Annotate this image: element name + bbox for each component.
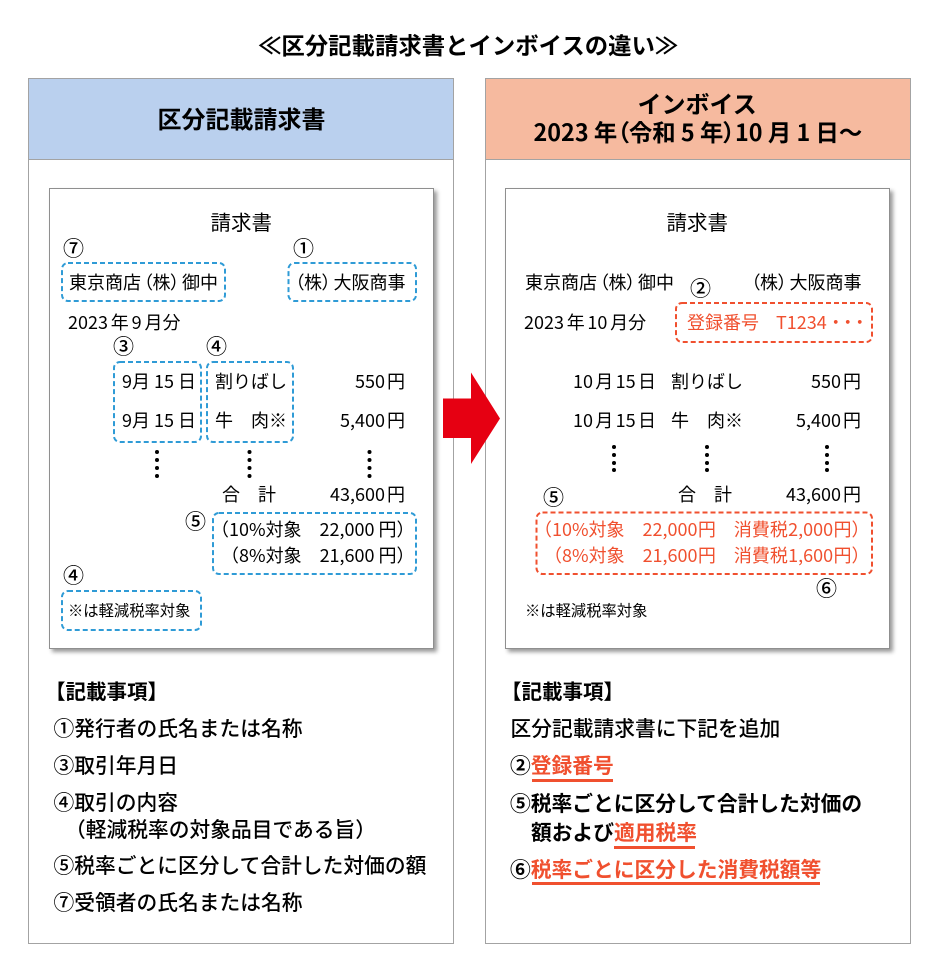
tax line 10 right: （10%対象 22,000 円 消費税 2,000 円） [534, 516, 869, 542]
date 1 right: 10 月 15 日 [573, 368, 656, 394]
item 7: ⑦受領者の氏名または名称 [54, 886, 303, 916]
underline 6 [532, 882, 820, 884]
addressee right: 東京商店（株）御中 [525, 269, 674, 295]
billing month right: 2023 年 10 月分 [524, 309, 646, 335]
registration number: 登録番号 T1234・・・ [687, 309, 863, 335]
reduced rate note: ※は軽減税率対象 [68, 599, 190, 621]
total amount: 43,600 円 [330, 481, 405, 507]
list heading: 【記載事項】 [45, 675, 168, 705]
item 4: ④取引の内容 [54, 786, 178, 816]
tax line 8: （8%対象 21,600 円） [221, 542, 415, 568]
reduced rate note right: ※は軽減税率対象 [525, 599, 647, 621]
date 1: 9月 15 日 [122, 368, 196, 394]
underline 5 [614, 846, 695, 848]
price 2 right: 5,400 円 [796, 407, 861, 433]
tax line 8 right: （8%対象 21,600 円 消費税 1,600 円） [544, 542, 869, 568]
date 2: 9月 15 日 [122, 407, 196, 433]
panel: left [28, 78, 454, 944]
badge 7: ⑦ [63, 233, 84, 263]
item 5: ⑤税率ごとに区分して合計した対価の額 [54, 849, 426, 879]
heading: left: 区分記載請求書 [158, 100, 326, 135]
panel: right [484, 78, 910, 944]
item 5: ⑤税率ごとに区分して合計した対価の [510, 787, 862, 817]
invoice title: right: 請求書 [666, 206, 728, 236]
price 1 right: 550 円 [811, 368, 861, 394]
price 1: 550 円 [355, 368, 405, 394]
badge 2: ② [690, 273, 711, 303]
billing month: 2023 年 9 月分 [68, 309, 180, 335]
item 3: ③取引年月日 [54, 749, 178, 779]
list heading: 【記載事項】 [501, 675, 624, 705]
heading: right: インボイス [638, 85, 757, 120]
item 6: ⑥税率ごとに区分した消費税額等 [510, 853, 821, 883]
item 2: ②登録番号 [510, 749, 614, 779]
heading: right: 2023 年（令和 5 年）10 月 1 日～ [534, 114, 862, 148]
badge 3: ③ [113, 331, 134, 361]
title: ≪区分記載請求書とインボイスの違い≫ [258, 27, 678, 61]
item 2 right: 牛 肉※ [671, 407, 743, 433]
item 2: 牛 肉※ [215, 407, 287, 433]
invoice title: left: 請求書 [210, 206, 272, 236]
badge 6: ⑥ [816, 573, 837, 603]
invoice: right [505, 188, 890, 649]
issuer right: （株）大阪商事 [751, 269, 862, 295]
invoice: left [49, 188, 434, 649]
price 2: 5,400 円 [340, 407, 405, 433]
item 1: 割りばし [215, 368, 287, 394]
list: right [501, 675, 862, 885]
total amount right: 43,600 円 [786, 481, 861, 507]
date 2 right: 10 月 15 日 [573, 407, 656, 433]
item 5 second line: 額および適用税率 [531, 816, 697, 846]
issuer: （株）大阪商事 [295, 269, 406, 295]
tax line 10: （10%対象 22,000 円） [211, 516, 415, 542]
list: left [45, 675, 426, 916]
total label: 合 計 [222, 481, 276, 507]
item 4 detail: （軽減税率の対象品目である旨） [65, 813, 376, 843]
item 1: ①発行者の氏名または名称 [54, 712, 303, 742]
intro: 区分記載請求書に下記を追加 [510, 712, 780, 742]
addressee: 東京商店（株）御中 [69, 269, 218, 295]
badge 4: ④ [206, 331, 227, 361]
badge 1: ① [293, 233, 314, 263]
heading: right [484, 78, 910, 160]
item 1 right: 割りばし [671, 368, 743, 394]
heading: left [28, 78, 454, 160]
badge 5: ⑤ [185, 506, 206, 536]
badge 5 right: ⑤ [543, 482, 564, 512]
total label right: 合 計 [678, 481, 732, 507]
underline 2 [532, 779, 613, 782]
badge 4 note: ④ [63, 560, 84, 590]
